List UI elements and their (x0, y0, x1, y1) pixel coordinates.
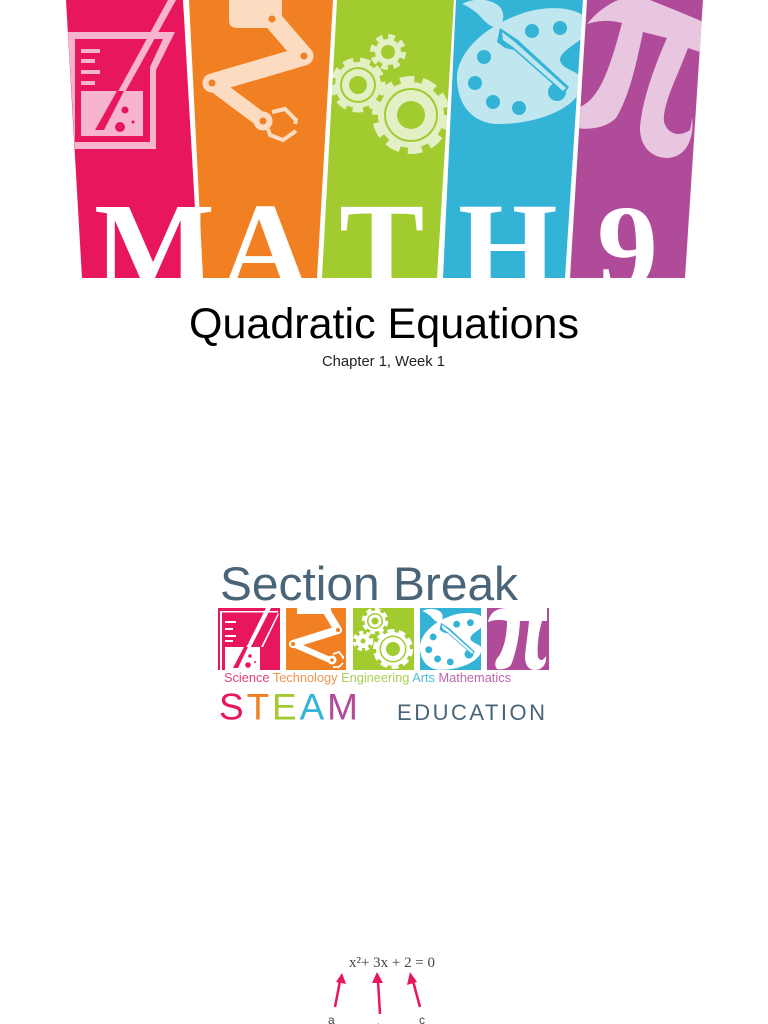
icon: beaker (218, 608, 280, 670)
equation diagram (328, 955, 435, 1024)
band: engineering (322, 0, 454, 278)
heading: MATH 9: T (339, 177, 424, 319)
arrow to c (407, 972, 420, 1007)
band: technology (189, 0, 333, 278)
icon: palette (420, 608, 485, 670)
equation: x²+ 3x + 2 = 0 (349, 955, 435, 971)
STEAM words row: Science Technology Engineering Arts Mathematics (224, 671, 511, 685)
section break heading: Section Break (220, 557, 519, 610)
EDUCATION label: EDUCATION (397, 700, 545, 725)
header graphic: STEAM bands with MATH 9 (66, 0, 703, 278)
STEAM wordmark: STEAM (219, 686, 358, 728)
arrow to b (372, 972, 383, 1014)
heading: MATH 9 (94, 177, 658, 319)
band: mathematics (570, 0, 703, 278)
arrow to a (335, 973, 346, 1007)
icon: gears (353, 608, 414, 670)
subtitle: Chapter 1, Week 1 (322, 354, 445, 370)
heading: MATH 9: M (94, 177, 215, 319)
icon: pi (487, 608, 549, 670)
band: science (66, 0, 199, 278)
heading: MATH 9: H (458, 177, 558, 319)
band: arts (443, 0, 590, 278)
icon: robot arm (286, 608, 346, 670)
title: Quadratic Equations (189, 301, 579, 348)
heading: MATH 9: 9 (597, 181, 658, 316)
heading: MATH 9: A (219, 177, 311, 319)
STEAM icon row (218, 608, 549, 670)
